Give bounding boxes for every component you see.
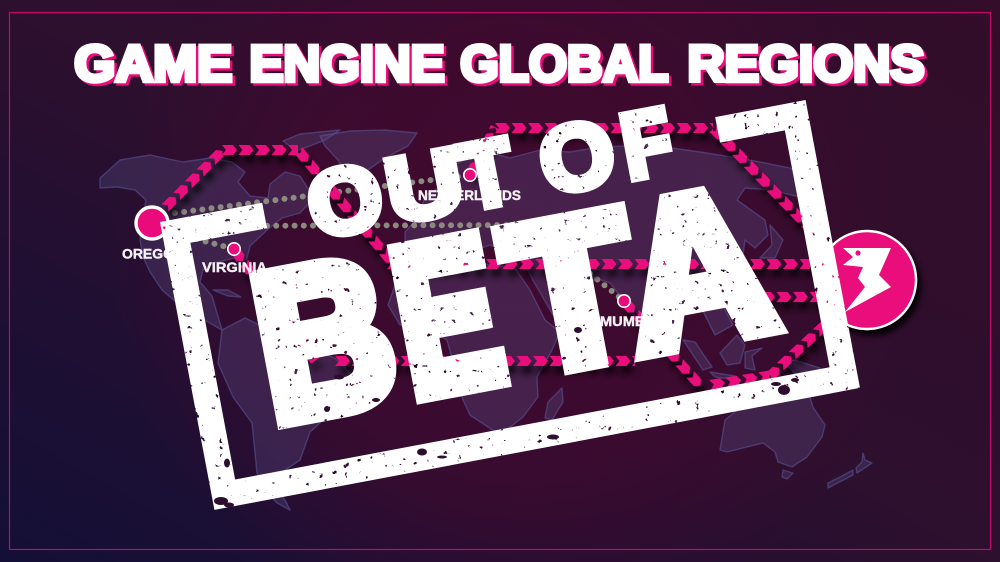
map: sulawesi bbox=[745, 348, 762, 370]
title shadow: ENGINE bbox=[252, 37, 447, 94]
dotted connections bbox=[170, 175, 624, 301]
map: greenland bbox=[320, 130, 417, 172]
map: tasmania bbox=[782, 470, 793, 479]
route: virginia lower bbox=[230, 246, 635, 366]
label: mumbai: MUMBAI bbox=[600, 314, 660, 329]
world map bbox=[100, 130, 872, 510]
route: mumbai to logo bbox=[620, 298, 828, 390]
route: top line via netherlands bbox=[466, 123, 842, 261]
map: madagascar bbox=[545, 388, 563, 420]
stamp text: BETA: E bbox=[376, 191, 518, 440]
dot: netherlands bbox=[464, 169, 476, 181]
map: new zealand north bbox=[856, 453, 872, 473]
map: new zealand south bbox=[828, 470, 853, 488]
label: oregon: OREGON bbox=[122, 246, 184, 262]
stamp: large wear marks bbox=[214, 327, 799, 508]
stamp text: BETA bbox=[236, 139, 790, 467]
dot: oregon bbox=[136, 207, 168, 239]
route: middle horizontal bbox=[387, 259, 810, 269]
stamp text: OUT OF: T bbox=[453, 119, 521, 229]
title text bbox=[74, 35, 925, 92]
map: north america bbox=[100, 155, 314, 330]
dot: mumbai bbox=[618, 295, 630, 307]
stamp frame bbox=[160, 100, 860, 510]
dotted line: oregon to netherlands bbox=[175, 175, 470, 213]
map: cuba bbox=[213, 290, 241, 297]
stamp text: OUT OF: U bbox=[377, 128, 472, 244]
map: borneo bbox=[720, 335, 745, 365]
map: new guinea bbox=[785, 360, 832, 384]
dotted line: oregon to mumbai bbox=[175, 225, 624, 301]
map: japan bbox=[760, 225, 783, 258]
stamp text: OUT OF: F bbox=[614, 89, 680, 199]
logo badge bbox=[818, 231, 916, 329]
map: sumatra bbox=[683, 340, 712, 370]
stamp: out of beta bbox=[153, 62, 860, 510]
map: arctic islands bbox=[283, 130, 340, 151]
route: oregon north arc bbox=[161, 145, 397, 267]
title text: GLOBAL bbox=[460, 35, 668, 92]
logo eye bbox=[855, 250, 861, 256]
logo circle bbox=[818, 231, 916, 329]
stamp text: BETA: B bbox=[237, 212, 412, 467]
label: netherlands: NETHERLANDS bbox=[418, 188, 521, 203]
route: lower right stub bbox=[760, 292, 822, 302]
map: java bbox=[710, 372, 737, 380]
title text: ENGINE bbox=[250, 35, 444, 92]
title shadow: REGIONS bbox=[690, 37, 927, 94]
map: eurasia bbox=[405, 145, 815, 345]
stamp text: OUT OF: O bbox=[299, 143, 391, 258]
title bbox=[74, 35, 927, 94]
label: virginia: VIRGINIA bbox=[202, 260, 267, 275]
map: africa bbox=[388, 255, 560, 435]
stamp text: BETA: A bbox=[603, 140, 790, 398]
title text: REGIONS bbox=[688, 35, 924, 92]
stamp text: OUT OF bbox=[299, 88, 680, 259]
title shadow: GAME bbox=[77, 37, 235, 94]
title shadow: GLOBAL bbox=[463, 37, 671, 94]
map: australia bbox=[720, 386, 825, 467]
title shadow bbox=[77, 37, 927, 94]
region labels bbox=[122, 188, 660, 329]
title text: GAME bbox=[74, 35, 232, 92]
dot: virginia bbox=[228, 243, 240, 255]
logo lightning mark bbox=[843, 248, 891, 312]
region dots bbox=[136, 169, 630, 307]
map: south america bbox=[218, 318, 352, 510]
dotted line: oregon to virginia bbox=[170, 232, 234, 249]
chevron routes bbox=[161, 123, 842, 390]
stamp text: OUT OF: O bbox=[531, 99, 623, 214]
stamp text: BETA: T bbox=[489, 166, 656, 420]
